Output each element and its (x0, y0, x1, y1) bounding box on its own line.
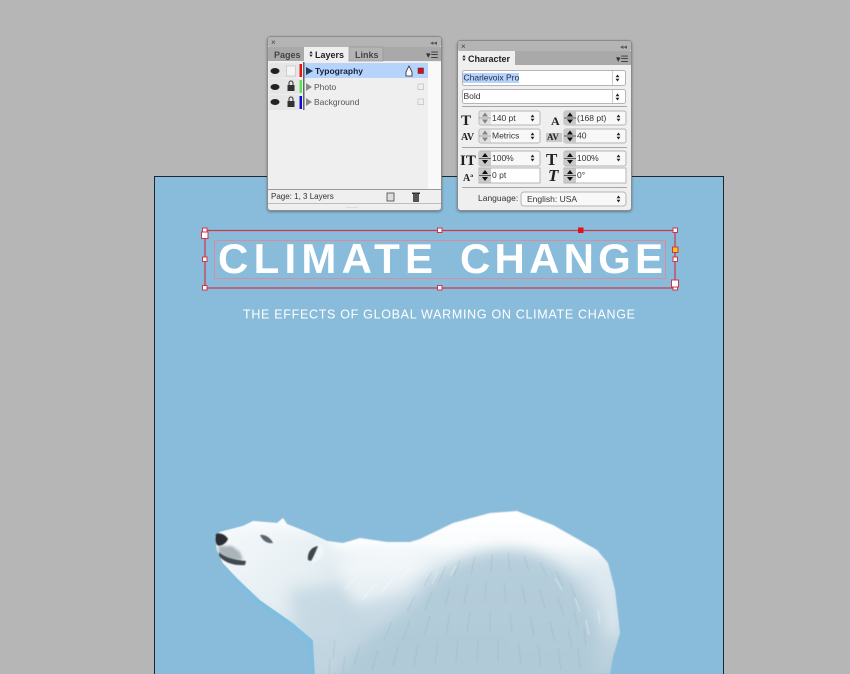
language selector (478, 192, 626, 206)
panel: layers: Pages (274, 50, 301, 60)
text frame outer selection (205, 230, 675, 288)
skew: T (548, 166, 559, 185)
layer row: Photo: Photo (314, 82, 336, 92)
font family field (462, 70, 626, 86)
tracking (546, 129, 626, 143)
tracking: 40 (577, 130, 587, 140)
kerning: Metrics (492, 130, 519, 140)
title (218, 235, 663, 282)
panel: character: Character (468, 54, 511, 64)
vertical scale (460, 151, 540, 169)
panel: layers: × (271, 38, 276, 47)
horizontal scale: 100% (577, 153, 599, 163)
baseline shift (463, 168, 540, 184)
tab row (268, 47, 441, 61)
font size: T (461, 113, 471, 129)
bear shading and fur (210, 525, 620, 674)
panel footer (268, 190, 441, 211)
title: CLIMATE (218, 235, 433, 282)
document page (154, 176, 724, 674)
panel: character (458, 40, 632, 210)
tracking: AV (547, 132, 559, 142)
language selector: Language: (478, 193, 518, 203)
font style field: Bold (464, 91, 481, 101)
baseline shift: 0 pt (492, 170, 507, 180)
right column (428, 62, 441, 189)
kerning (461, 129, 540, 143)
panel footer: ······ (346, 205, 358, 211)
panel title bar (458, 41, 631, 51)
leading (551, 111, 626, 128)
bear ear (308, 544, 324, 563)
panel: layers: ▾☰ (426, 50, 439, 60)
panel: character: × (461, 42, 466, 51)
horizontal scale (546, 150, 626, 169)
bear body (215, 511, 620, 674)
bear cyan halo (223, 563, 315, 674)
language selector: English: USA (527, 194, 577, 204)
title: CHANGE (460, 235, 663, 282)
vertical scale: 100% (492, 153, 514, 163)
panel title bar (268, 37, 441, 47)
title frame selection (202, 228, 678, 290)
panel footer: Page: 1, 3 Layers (271, 192, 334, 201)
font style field (462, 90, 626, 104)
skew (548, 166, 626, 185)
leading: (168 pt) (577, 113, 606, 123)
photo: polar bear (210, 511, 620, 674)
font size: 140 pt (492, 113, 516, 123)
font size (461, 111, 540, 129)
vertical scale: IT (460, 153, 476, 169)
panel: layers: Layers (315, 50, 344, 60)
baseline shift: Aª (463, 173, 473, 184)
layer row: Background: Background (314, 97, 360, 107)
bear eye (260, 535, 273, 543)
panel: character: ▾☰ (616, 54, 629, 64)
subtitle: THE EFFECTS OF GLOBAL WARMING ON CLIMATE CHANGE (243, 308, 635, 322)
skew: 0° (577, 170, 585, 180)
panel: character: ◂◂ (620, 44, 628, 51)
layer row: Typography: Typography (315, 66, 363, 76)
leading: A (551, 114, 560, 128)
panel: layers: ◂◂ (430, 40, 438, 47)
horizontal scale: T (546, 150, 558, 169)
layer row: Typography (269, 63, 428, 78)
tab row (458, 51, 631, 65)
panel: layers: Links (355, 50, 379, 60)
kerning: AV (461, 132, 475, 143)
layer row: Background (269, 95, 424, 110)
bear mouth (219, 552, 246, 565)
panel: layers (268, 36, 442, 211)
bear nose (215, 533, 228, 546)
bear muzzle (218, 546, 243, 560)
text frame inner guide (214, 240, 666, 278)
layer row: Photo (269, 79, 424, 94)
selection handles (202, 228, 678, 290)
font family field: Charlevoix Pro (464, 72, 520, 82)
